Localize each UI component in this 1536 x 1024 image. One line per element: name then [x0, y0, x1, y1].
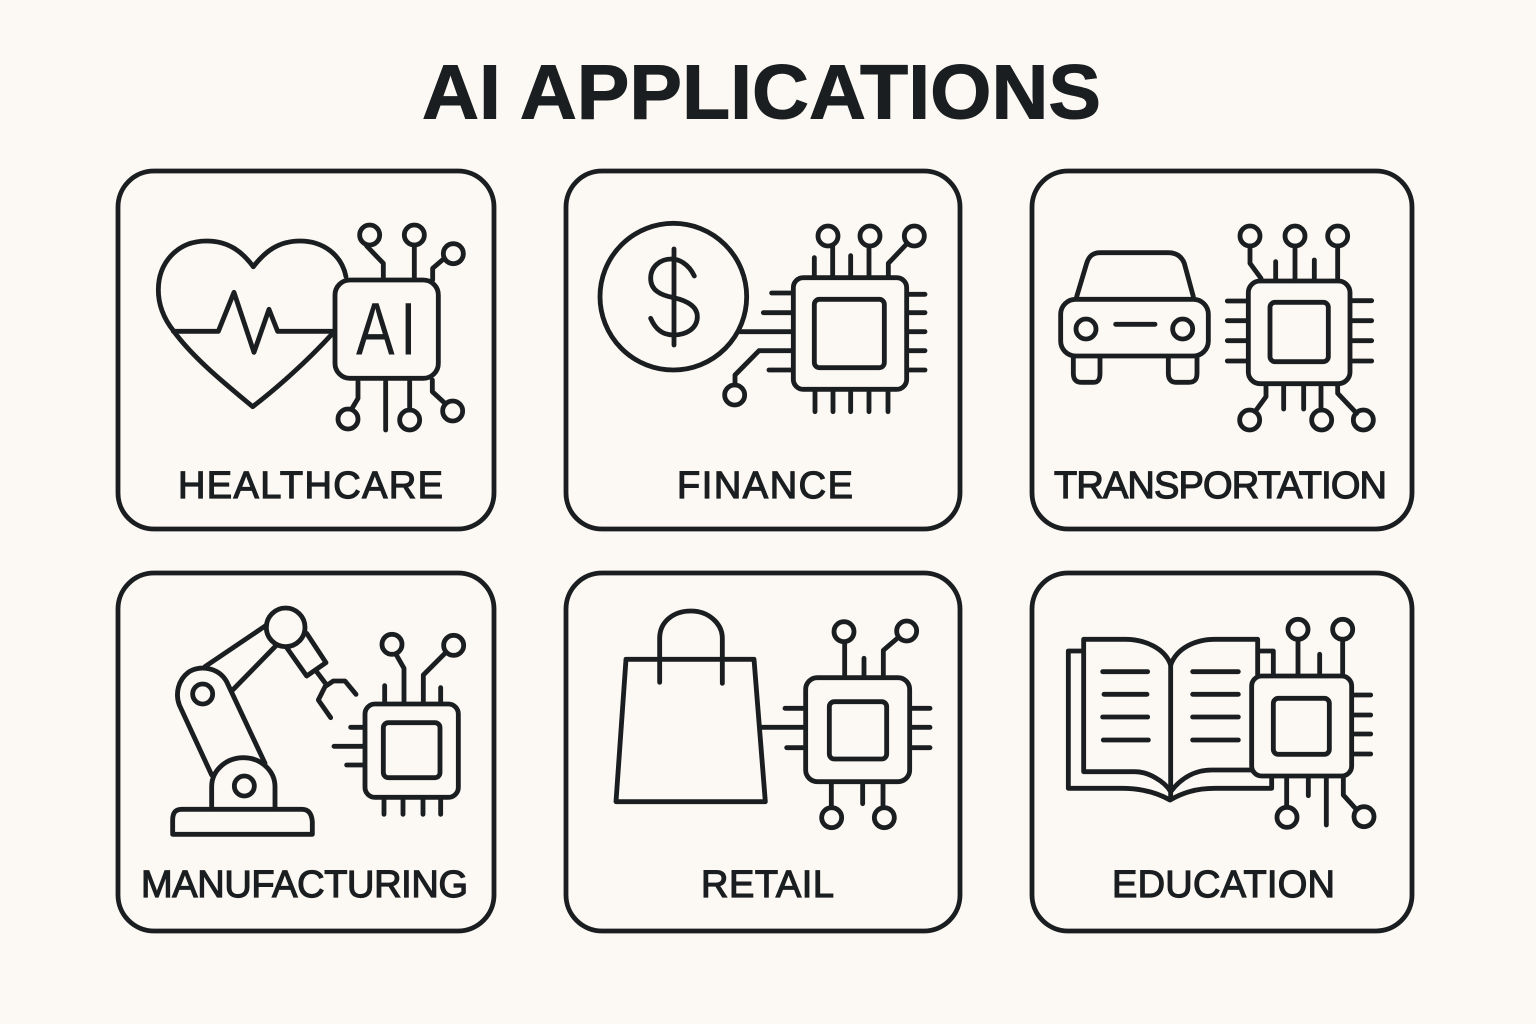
icon: AI chip: I — [400, 289, 416, 371]
icon: robot arm — [173, 608, 356, 834]
retail card frame — [566, 573, 960, 931]
icon: chip — [725, 226, 925, 412]
label: transportation: TRANSPORTATION — [1054, 465, 1387, 507]
label: education: EDUCATION — [1112, 864, 1335, 906]
icon: open book — [1068, 639, 1273, 800]
icon: robot arm with chip — [173, 608, 464, 834]
panel: manufacturing — [118, 573, 494, 931]
finance card frame — [566, 171, 960, 529]
icon: chip — [334, 634, 464, 814]
icon: car with chip — [1061, 226, 1373, 430]
label: retail: RETAIL — [701, 864, 834, 906]
icon: heart with pulse — [158, 241, 346, 407]
transportation card frame — [1032, 171, 1412, 529]
icon: AI chip: A — [356, 289, 395, 371]
icon: car — [1061, 253, 1208, 382]
icon: chip — [1252, 619, 1374, 827]
label: manufacturing: MANUFACTURING — [141, 864, 468, 906]
label: finance: FINANCE — [677, 465, 853, 507]
manufacturing card frame — [118, 573, 494, 931]
panel: finance — [566, 171, 960, 529]
label: healthcare: HEALTHCARE — [178, 465, 443, 507]
title: AI APPLICATIONS — [422, 50, 1101, 136]
icon: dollar coin — [600, 223, 747, 370]
panel: retail — [566, 573, 960, 931]
icon: shopping bag — [616, 611, 765, 802]
icon: chip — [1227, 226, 1373, 430]
icon: open book with chip — [1068, 619, 1374, 827]
education card frame — [1032, 573, 1412, 931]
panel: education — [1032, 573, 1412, 931]
icon: chip — [762, 621, 930, 828]
healthcare card frame — [118, 171, 494, 529]
icon: dollar coin with chip — [600, 223, 925, 412]
icon: shopping bag with chip — [616, 611, 930, 828]
icon: AI chip — [335, 225, 463, 430]
panel: healthcare — [118, 171, 494, 529]
icon: heart with AI chip — [158, 225, 463, 430]
panel: transportation — [1032, 171, 1412, 529]
